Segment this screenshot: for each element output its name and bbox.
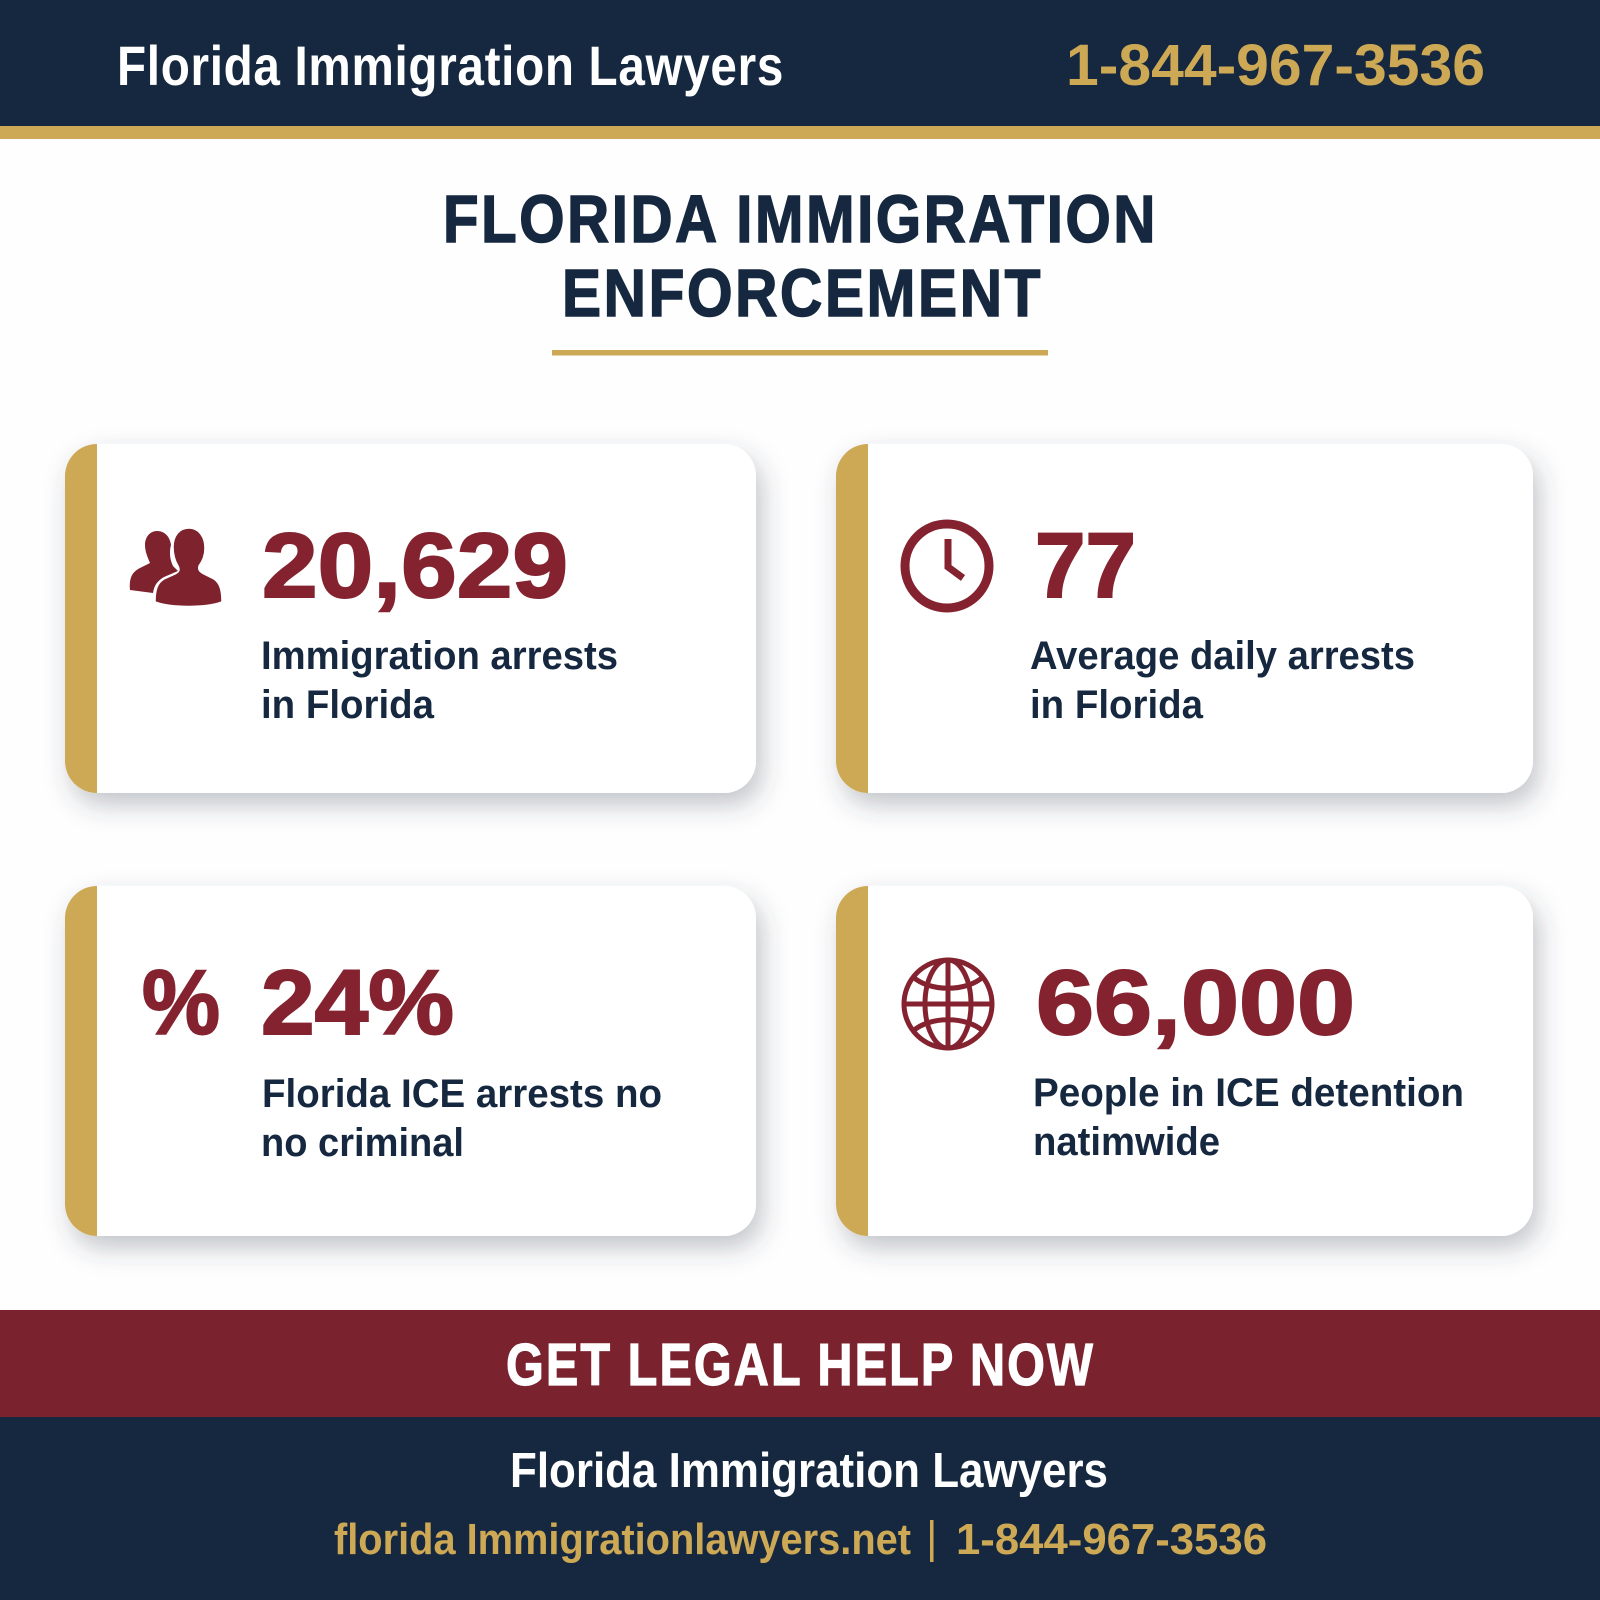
footer [0,1417,1600,1600]
title: ENFORCEMENT [562,256,1043,331]
stat label: no criminal [261,1121,464,1165]
stat label: People in ICE detention [1033,1071,1464,1115]
stat label: Average daily arrests [1030,634,1415,678]
stat label [261,1072,662,1165]
stat number: 20,629 [262,515,568,617]
stat label [1033,1071,1464,1164]
panel: ICE arrests no criminal [65,886,756,1236]
stat number: 66,000 [1036,952,1355,1054]
title: FLORIDA IMMIGRATION [443,182,1158,257]
footer website: florida Immigrationlawyers.net [334,1515,911,1564]
stat label: in Florida [261,683,435,727]
icon: clock [905,524,989,608]
header phone number: 1-844-967-3536 [1066,33,1485,98]
stat number: 77 [1035,515,1136,617]
title underline [552,350,1048,356]
panel: immigration arrests [65,444,756,793]
icon: percent: % [142,952,220,1054]
stat label: Immigration arrests [261,634,618,678]
stat label: natimwide [1033,1120,1220,1164]
icon: globe [904,960,992,1048]
call-to-action band: GET LEGAL HELP NOW [506,1332,1095,1398]
stat label [261,634,618,727]
stat number: 24% [261,952,454,1054]
header bar [0,0,1600,139]
stat label [1030,634,1415,727]
footer phone: 1-844-967-3536 [956,1515,1267,1564]
header firm name: Florida Immigration Lawyers [117,34,784,97]
stat label: in Florida [1030,683,1204,727]
panel: average daily arrests [836,444,1533,793]
panel: ICE detention nationwide [836,886,1533,1236]
icon: people [130,528,222,606]
footer divider [930,1520,934,1562]
title [443,182,1158,331]
stat label: Florida ICE arrests no [262,1072,662,1116]
call-to-action band [0,1310,1600,1417]
footer firm name: Florida Immigration Lawyers [510,1444,1108,1498]
